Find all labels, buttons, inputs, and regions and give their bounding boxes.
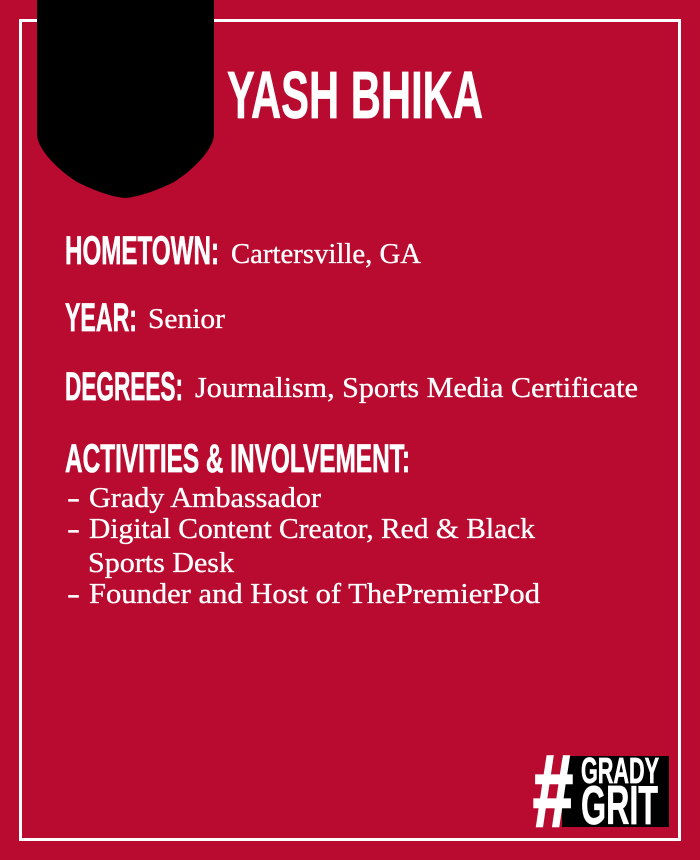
degrees row: Journalism, Sports Media Certificate	[195, 372, 638, 404]
year row: Senior	[148, 303, 225, 335]
degrees row: DEGREES:	[65, 365, 183, 409]
activities list: -	[67, 578, 80, 610]
year row: YEAR:	[65, 296, 137, 340]
activities list	[67, 482, 541, 610]
degrees row	[65, 365, 638, 409]
title: YASH BHIKA	[227, 58, 483, 133]
hometown row: HOMETOWN:	[65, 229, 219, 273]
activities list: -	[67, 482, 80, 514]
activities list: Sports Desk	[88, 547, 235, 579]
icon: black shield banner	[37, 0, 214, 198]
activities heading: ACTIVITIES & INVOLVEMENT:	[65, 437, 410, 481]
activities list: Founder and Host of ThePremierPod	[89, 578, 541, 610]
activities list: Grady Ambassador	[89, 482, 321, 514]
logo: #GradyGrit: #	[533, 734, 573, 848]
activities list: -	[67, 513, 80, 545]
hometown row: Cartersville, GA	[231, 238, 421, 270]
activities list: Digital Content Creator, Red & Black	[89, 513, 535, 545]
logo: #GradyGrit	[533, 734, 669, 848]
